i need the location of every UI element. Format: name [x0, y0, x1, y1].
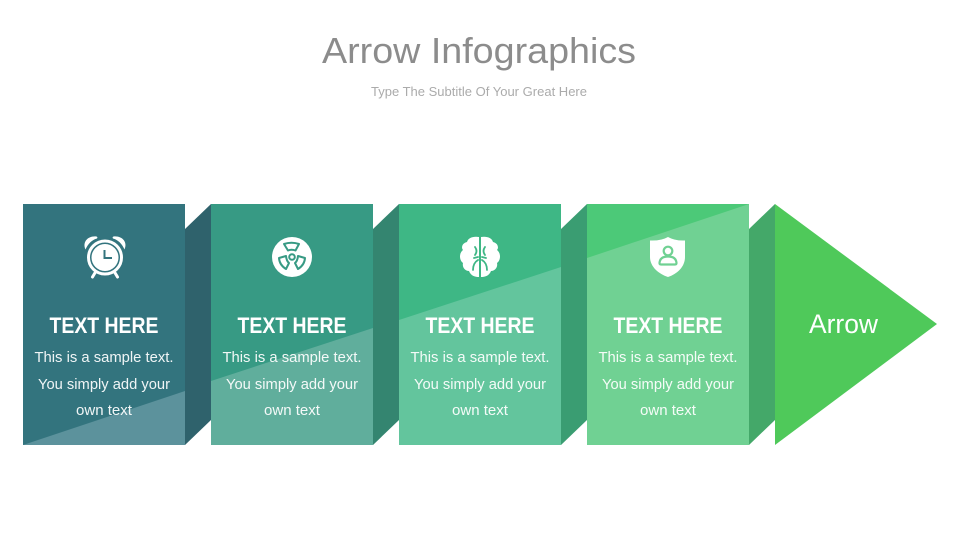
icon: brain [460, 237, 500, 277]
body text: You simply add your [602, 376, 734, 393]
panel: step 1 [23, 204, 211, 445]
body text: This is a sample text. [222, 349, 362, 366]
arrow head [775, 204, 937, 445]
panel: step 3 [399, 204, 587, 445]
heading: TEXT HERE [238, 313, 346, 338]
body text: This is a sample text. [598, 349, 738, 366]
body text: This is a sample text. [410, 349, 550, 366]
heading: TEXT HERE [50, 313, 158, 338]
body text [410, 349, 550, 419]
body text [34, 349, 174, 419]
body text: You simply add your [414, 376, 546, 393]
body text [598, 349, 738, 419]
body text: own text [640, 402, 697, 419]
body text: own text [76, 402, 133, 419]
body text: own text [452, 402, 509, 419]
title: Arrow Infographics [322, 30, 636, 71]
subtitle: Type The Subtitle Of Your Great Here [371, 84, 587, 99]
body text: You simply add your [38, 376, 170, 393]
icon: shield with person [650, 237, 685, 277]
heading: TEXT HERE [426, 313, 534, 338]
panel: step 2 [211, 204, 399, 445]
icon: alarm clock [84, 236, 126, 277]
body text: You simply add your [226, 376, 358, 393]
body text: This is a sample text. [34, 349, 174, 366]
panel: step 4 [587, 204, 775, 445]
arrow label: Arrow [809, 309, 878, 339]
body text [222, 349, 362, 419]
body text: own text [264, 402, 321, 419]
icon: radiation [272, 237, 312, 277]
heading: TEXT HERE [614, 313, 722, 338]
